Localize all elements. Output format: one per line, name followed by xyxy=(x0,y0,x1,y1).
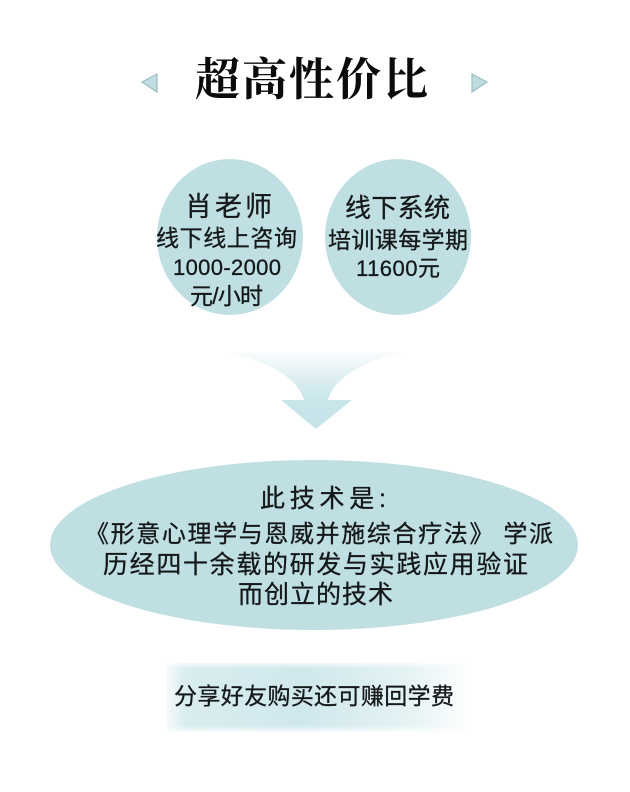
text: course price: 11600元 xyxy=(356,256,440,281)
text: line 3: 而创立的技术 xyxy=(238,581,393,609)
text: price range: 1000-2000 xyxy=(173,255,281,280)
text: unit: 元/小时 xyxy=(190,283,263,309)
text: consult type: 线下线上咨询 xyxy=(156,225,297,251)
text: course per term: 培训课每学期 xyxy=(328,227,468,253)
text: share note: 分享好友购买还可赚回学费 xyxy=(174,683,454,709)
circle heading: offline system: 线下系统 xyxy=(345,193,450,223)
arrow: down gradient xyxy=(223,352,407,429)
panel: teacher price circle xyxy=(156,159,303,315)
title: 超高性价比 xyxy=(195,55,428,105)
panel: course price circle xyxy=(325,159,471,315)
icon: left triangle xyxy=(142,74,157,92)
icon: right triangle xyxy=(472,74,487,92)
ellipse heading: 此技术是: xyxy=(260,485,386,513)
circle heading: teacher: 肖老师 xyxy=(185,192,272,222)
panel: share banner xyxy=(167,663,473,732)
text: line 2: 历经四十余载的研发与实践应用验证 xyxy=(103,551,528,579)
text: line 1: 《形意心理学与恩威并施综合疗法》 学派 xyxy=(85,521,553,548)
panel: technique ellipse xyxy=(50,460,578,630)
